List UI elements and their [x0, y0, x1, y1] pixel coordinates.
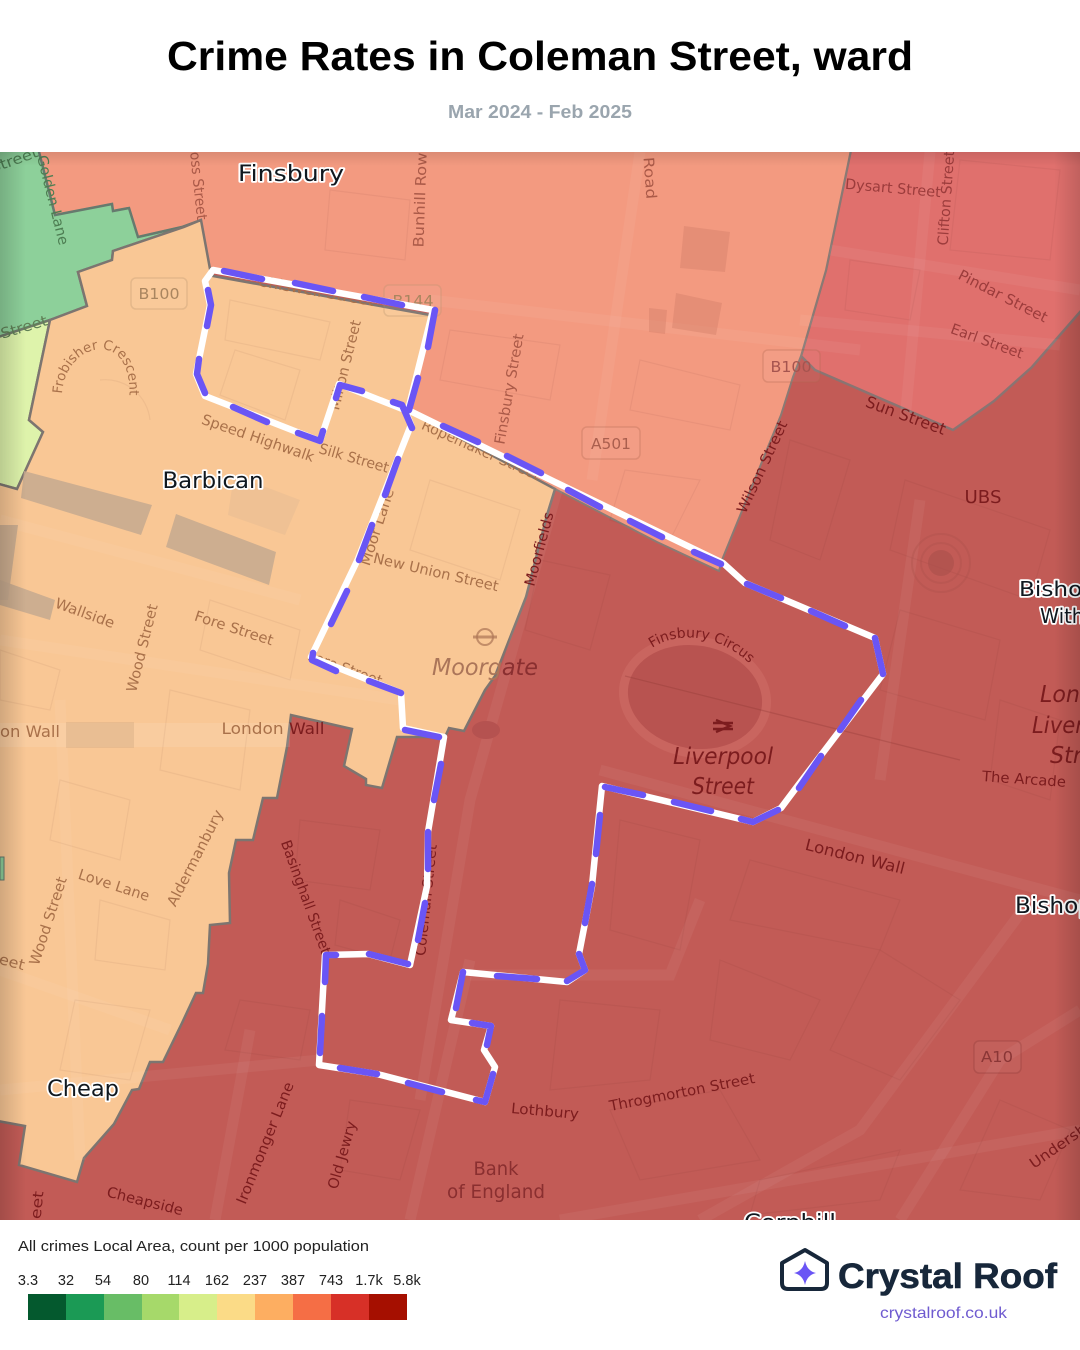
- label: Silk Street: Silk Street: [317, 441, 391, 477]
- title: Crime Rates in Coleman Street, ward: [167, 33, 913, 79]
- place: Cheap: Cheap: [47, 1077, 119, 1102]
- label: London Wall west fragment: on Wall: [0, 722, 60, 741]
- UBS roundabout: [911, 543, 954, 576]
- label: Throgmorton Street: Throgmorton Street: [607, 1071, 757, 1115]
- shield B144: B144: [392, 292, 434, 310]
- region: dark red high crime: [0, 274, 1080, 1220]
- label: Cheapside: Cheapside: [105, 1185, 185, 1219]
- region: green low crime: [0, 140, 201, 339]
- shield A10: A10: [981, 1048, 1013, 1066]
- region: light red Sun Street: [801, 140, 1080, 430]
- place: Barbican: Barbican: [162, 469, 264, 494]
- shield B100 east: B100: [770, 358, 812, 376]
- logo: Crystal Roof: [782, 1250, 1057, 1322]
- website url: crystalroof.co.uk: [880, 1305, 1008, 1322]
- buildings north of A501: [649, 226, 730, 335]
- label: Bank of England: Bank: [474, 1158, 518, 1180]
- region: salmon Finsbury: [36, 140, 853, 571]
- legend tick labels: 32: [58, 1273, 74, 1289]
- label: Dysart Street: Dysart Street: [844, 177, 942, 201]
- label: eet fragment bottom: eet: [29, 1190, 47, 1220]
- label: Wood Street north: Wood Street: [124, 602, 162, 694]
- label: Milton Street: Milton Street: [327, 318, 365, 412]
- label: Fore Street east: Fore Street: [305, 648, 384, 690]
- shield A10: [974, 1041, 1021, 1073]
- label: Wallside: Wallside: [53, 596, 117, 632]
- shield B100 west: B100: [138, 285, 180, 303]
- label: Lothbury: Lothbury: [510, 1101, 580, 1123]
- label: Bunhill Row: Bunhill Row: [411, 152, 431, 248]
- legend tick labels: 3.3: [18, 1273, 38, 1289]
- place: Finsbury: Finsbury: [238, 162, 344, 187]
- legend tick labels: 80: [133, 1273, 149, 1289]
- legend colour scale: [28, 1294, 407, 1320]
- label: Basinghall Street: Basinghall Street: [277, 838, 333, 957]
- label: Moss Street: Moss Street: [185, 139, 209, 221]
- label: Aldermanbury: Aldermanbury: [165, 807, 227, 909]
- legend: [18, 1239, 421, 1320]
- place: Cornhill: Cornhill: [744, 1211, 836, 1236]
- label: Clifton Street: Clifton Street: [936, 150, 958, 246]
- label: of England: of England: [447, 1181, 545, 1203]
- station: Moorgate: Moorgate: [432, 655, 538, 681]
- label: London Wall east: London Wall: [803, 835, 907, 878]
- label: Finsbury Circus: Finsbury Circus: [648, 627, 754, 662]
- legend tick labels: 1.7k: [355, 1273, 383, 1289]
- legend tick labels: 237: [243, 1273, 267, 1289]
- icon: national rail: [713, 720, 733, 732]
- legend tick labels: 5.8k: [393, 1273, 421, 1289]
- label: Speed Highwalk: Speed Highwalk: [199, 412, 317, 466]
- label: Moor Lane: Moor Lane: [358, 487, 398, 568]
- label: Golden Lane: Golden Lane: [33, 154, 71, 247]
- label: Ironmonger Lane: Ironmonger Lane: [234, 1080, 298, 1207]
- label: New Union Street: New Union Street: [372, 551, 500, 595]
- label: Coleman Street: Coleman Street: [413, 843, 441, 957]
- legend tick labels: 743: [319, 1273, 343, 1289]
- shield B144: [384, 285, 441, 316]
- label: Pindar Street: Pindar Street: [955, 268, 1050, 326]
- legend tick labels: 387: [281, 1273, 305, 1289]
- ward boundary: purple dashes: [197, 271, 883, 1102]
- shield A501: A501: [591, 435, 631, 453]
- logo wordmark: Crystal Roof: [838, 1257, 1057, 1296]
- subtitle: date range: Mar 2024 - Feb 2025: [448, 102, 632, 122]
- railway blocks near Barbican: [0, 471, 300, 620]
- label: Earl Street: Earl Street: [948, 321, 1025, 363]
- label: Love Lane: Love Lane: [76, 867, 151, 905]
- label: Road: Road: [640, 157, 658, 200]
- label: Wood Street south: Wood Street: [27, 875, 71, 968]
- small green fragment at left edge: [0, 857, 4, 880]
- icon: underground roundel: [473, 629, 497, 645]
- label: Sun Street: Sun Street: [863, 392, 949, 439]
- legend title: All crimes Local Area, count per 1000 population: [18, 1239, 369, 1255]
- label: Ropemaker Street: Ropemaker Street: [419, 418, 543, 484]
- region: peach Barbican and Moorgate: [0, 220, 555, 1182]
- label: Finsbury Street: Finsbury Street: [492, 332, 528, 446]
- label: Old Jewry: Old Jewry: [326, 1119, 360, 1191]
- London Wall underpass shading: [66, 722, 134, 748]
- ward boundary: white line: [196, 270, 883, 1102]
- streets and building footprints: [0, 152, 1080, 1220]
- label: Moorfields: Moorfields: [522, 510, 558, 588]
- railway track line: [625, 676, 960, 760]
- label: Chiswell Street: Chiswell Street: [256, 274, 376, 310]
- station labels: [432, 629, 1080, 800]
- shield B100 west: [131, 278, 187, 309]
- label: The Arcade: The Arcade: [980, 769, 1066, 791]
- label: Fore Street west: Fore Street: [192, 609, 275, 649]
- station: Liverpool Street: Liverpool: [673, 744, 774, 770]
- road shields: [131, 278, 1021, 1073]
- neighbourhood labels: [47, 162, 1080, 1236]
- icon: house with star: [782, 1250, 827, 1289]
- shield B100 east: [763, 350, 820, 382]
- station name second line: Street: [692, 774, 755, 800]
- label: Frobisher Crescent: Frobisher Crescent: [52, 340, 139, 396]
- map edge fade: [0, 152, 1080, 1220]
- shield A501: [582, 427, 640, 459]
- Finsbury Circus gardens: [619, 636, 771, 758]
- label: Wilson Street: Wilson Street: [735, 418, 791, 516]
- region: lime: [0, 320, 50, 489]
- label: UBS: UBS: [964, 487, 1002, 508]
- label: London Wall: London Wall: [222, 719, 324, 738]
- legend tick labels: 162: [205, 1273, 229, 1289]
- pond shape: [472, 721, 500, 739]
- label: Street over lime: Street: [0, 313, 50, 343]
- legend tick labels: 54: [95, 1273, 111, 1289]
- legend tick labels: [18, 1273, 421, 1289]
- legend tick labels: 114: [167, 1273, 191, 1289]
